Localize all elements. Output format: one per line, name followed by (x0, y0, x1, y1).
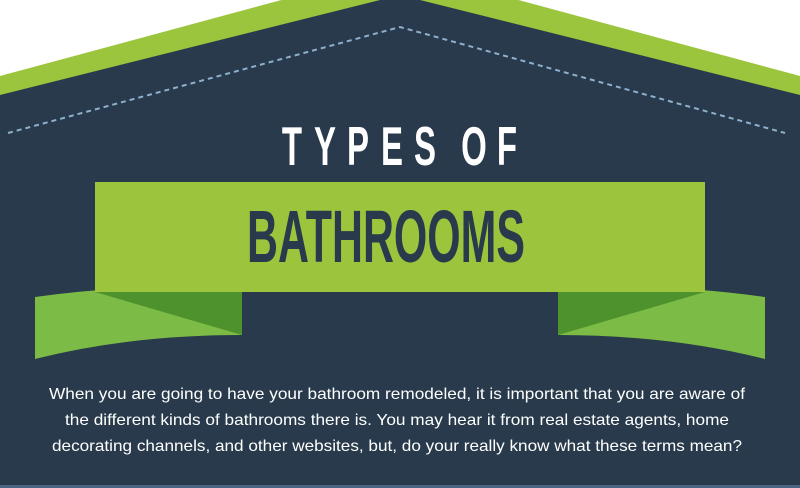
title: TYPES OF: Y (314, 115, 336, 177)
bottom stripe (0, 485, 800, 488)
intro paragraph: decorating channels, and other websites, but, do your really know what these terms mean? (52, 438, 742, 455)
title: TYPES OF: E (381, 115, 403, 177)
intro paragraph: When you are going to have your bathroom remodeled, it is important that you are aware of (49, 386, 746, 403)
title: TYPES OF: T (282, 115, 302, 177)
intro paragraph: the different kinds of bathrooms there is. You may hear it from real estate agents, home (65, 412, 729, 429)
title: TYPES OF: S (414, 115, 436, 177)
dashed roof line (8, 27, 785, 133)
intro paragraph (49, 386, 746, 455)
title: BATHROOMS: BATHROOMS (247, 195, 525, 278)
title: TYPES OF: O (461, 115, 487, 177)
ribbon: left end (35, 287, 242, 359)
ribbon: right end (558, 287, 765, 359)
ribbon: left fold (95, 292, 242, 335)
ribbon: main band (95, 182, 705, 292)
title: TYPES OF: F (497, 115, 517, 177)
ribbon (35, 182, 765, 359)
ribbon: right fold (558, 292, 705, 335)
title: TYPES OF: P (347, 115, 369, 177)
title: TYPES OF (282, 115, 517, 177)
